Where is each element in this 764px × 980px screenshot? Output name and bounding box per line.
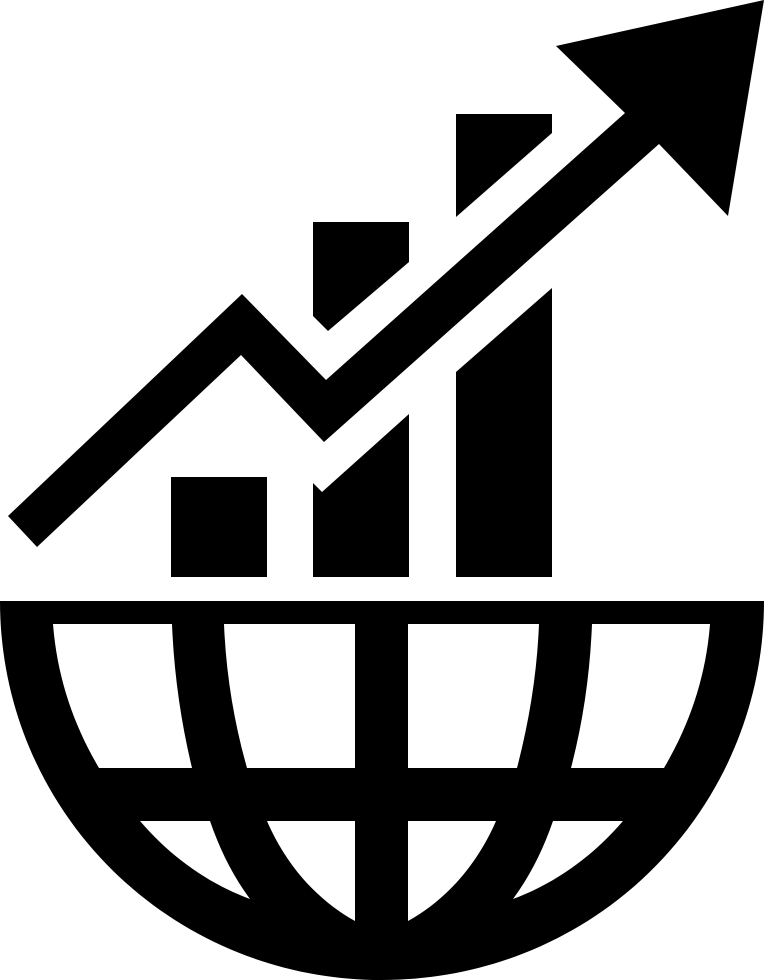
bar 2 lower part xyxy=(313,414,409,577)
icon: half globe with grid lines xyxy=(0,601,764,980)
bar chart xyxy=(171,114,552,577)
arrow: rising trend line xyxy=(8,0,764,547)
bar 3 upper part xyxy=(456,114,552,217)
bar 2 upper part xyxy=(313,222,409,331)
bar 1 xyxy=(171,477,267,577)
bar 3 lower part xyxy=(456,288,552,577)
